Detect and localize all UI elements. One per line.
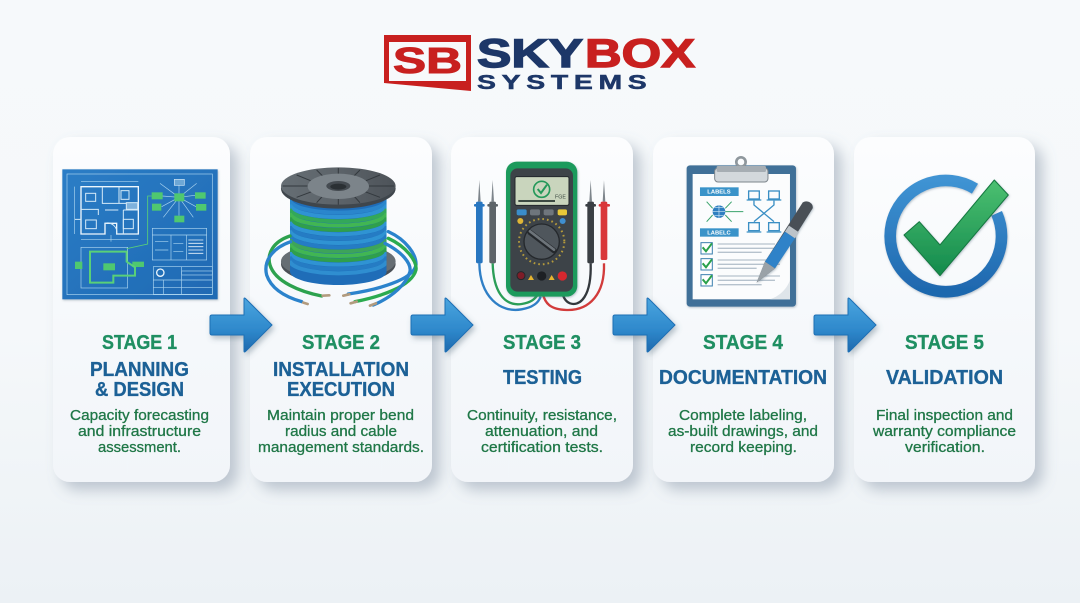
description: Maintain proper bend xyxy=(267,407,414,424)
description xyxy=(467,407,617,456)
description: record keeping. xyxy=(690,439,797,456)
description: as-built drawings, and xyxy=(668,423,818,440)
title: planning and design: & DESIGN xyxy=(95,379,184,401)
heading: stage 3: STAGE 3 xyxy=(503,332,581,354)
panel: stage 4 xyxy=(653,137,834,482)
heading: stage 1: STAGE 1 xyxy=(102,332,177,354)
description xyxy=(70,407,209,456)
panel: stage 1 xyxy=(53,137,230,482)
icon: clipboard checklist: LABELC xyxy=(707,231,731,237)
icon: multimeter: FGE xyxy=(555,195,566,201)
title: documentation: DOCUMENTATION xyxy=(659,367,827,389)
description: warranty compliance xyxy=(872,423,1016,440)
heading: stage 5: STAGE 5 xyxy=(905,332,984,354)
description: Complete labeling, xyxy=(679,407,807,424)
panel: stage 5 xyxy=(854,137,1035,482)
title: installation execution: INSTALLATION xyxy=(273,359,409,381)
panel: stage 3 xyxy=(451,137,633,482)
title: testing: TESTING xyxy=(503,367,582,389)
loose cables xyxy=(266,232,416,305)
title: installation execution xyxy=(273,359,409,401)
title: planning and design xyxy=(90,359,189,401)
logo mark: SB xyxy=(384,35,471,91)
description xyxy=(258,407,424,456)
icon: cable reel xyxy=(266,167,416,306)
description: assessment. xyxy=(98,439,181,456)
description xyxy=(668,407,818,456)
logo wordmark: BOX xyxy=(585,32,695,76)
description: Final inspection and xyxy=(876,407,1013,424)
title: installation execution: EXECUTION xyxy=(287,379,395,401)
logo wordmark: SKY xyxy=(477,32,583,76)
arrow: stage 1 to 2 xyxy=(210,298,272,352)
description xyxy=(872,407,1016,456)
logo mark: SB: SB xyxy=(393,40,462,81)
arrow: stage 2 to 3 xyxy=(411,298,473,352)
icon: multimeter xyxy=(474,162,610,310)
icon: clipboard checklist: LABELS xyxy=(707,190,731,196)
description: management standards. xyxy=(258,439,424,456)
description: Continuity, resistance, xyxy=(467,407,617,424)
logo wordmark: SYSTEMS xyxy=(477,72,652,94)
logo wordmark xyxy=(477,32,695,94)
description: verification. xyxy=(905,439,985,456)
description: certification tests. xyxy=(481,439,603,456)
title: validation: VALIDATION xyxy=(886,367,1003,389)
description: attenuation, and xyxy=(485,423,598,440)
arrow: stage 4 to 5 xyxy=(814,298,876,352)
arrow: stage 3 to 4 xyxy=(613,298,675,352)
heading: stage 2: STAGE 2 xyxy=(302,332,380,354)
description: and infrastructure xyxy=(78,423,201,440)
icon: network blueprint xyxy=(62,169,218,299)
probes xyxy=(474,180,610,263)
description: Capacity forecasting xyxy=(70,407,209,424)
icon: validation check mark xyxy=(890,180,1008,292)
description: radius and cable xyxy=(285,423,397,440)
panel: stage 2 xyxy=(250,137,432,482)
title: planning and design: PLANNING xyxy=(90,359,189,381)
logo: Skybox Systems xyxy=(384,32,695,94)
heading: stage 4: STAGE 4 xyxy=(703,332,784,354)
icon: clipboard checklist xyxy=(687,157,813,307)
